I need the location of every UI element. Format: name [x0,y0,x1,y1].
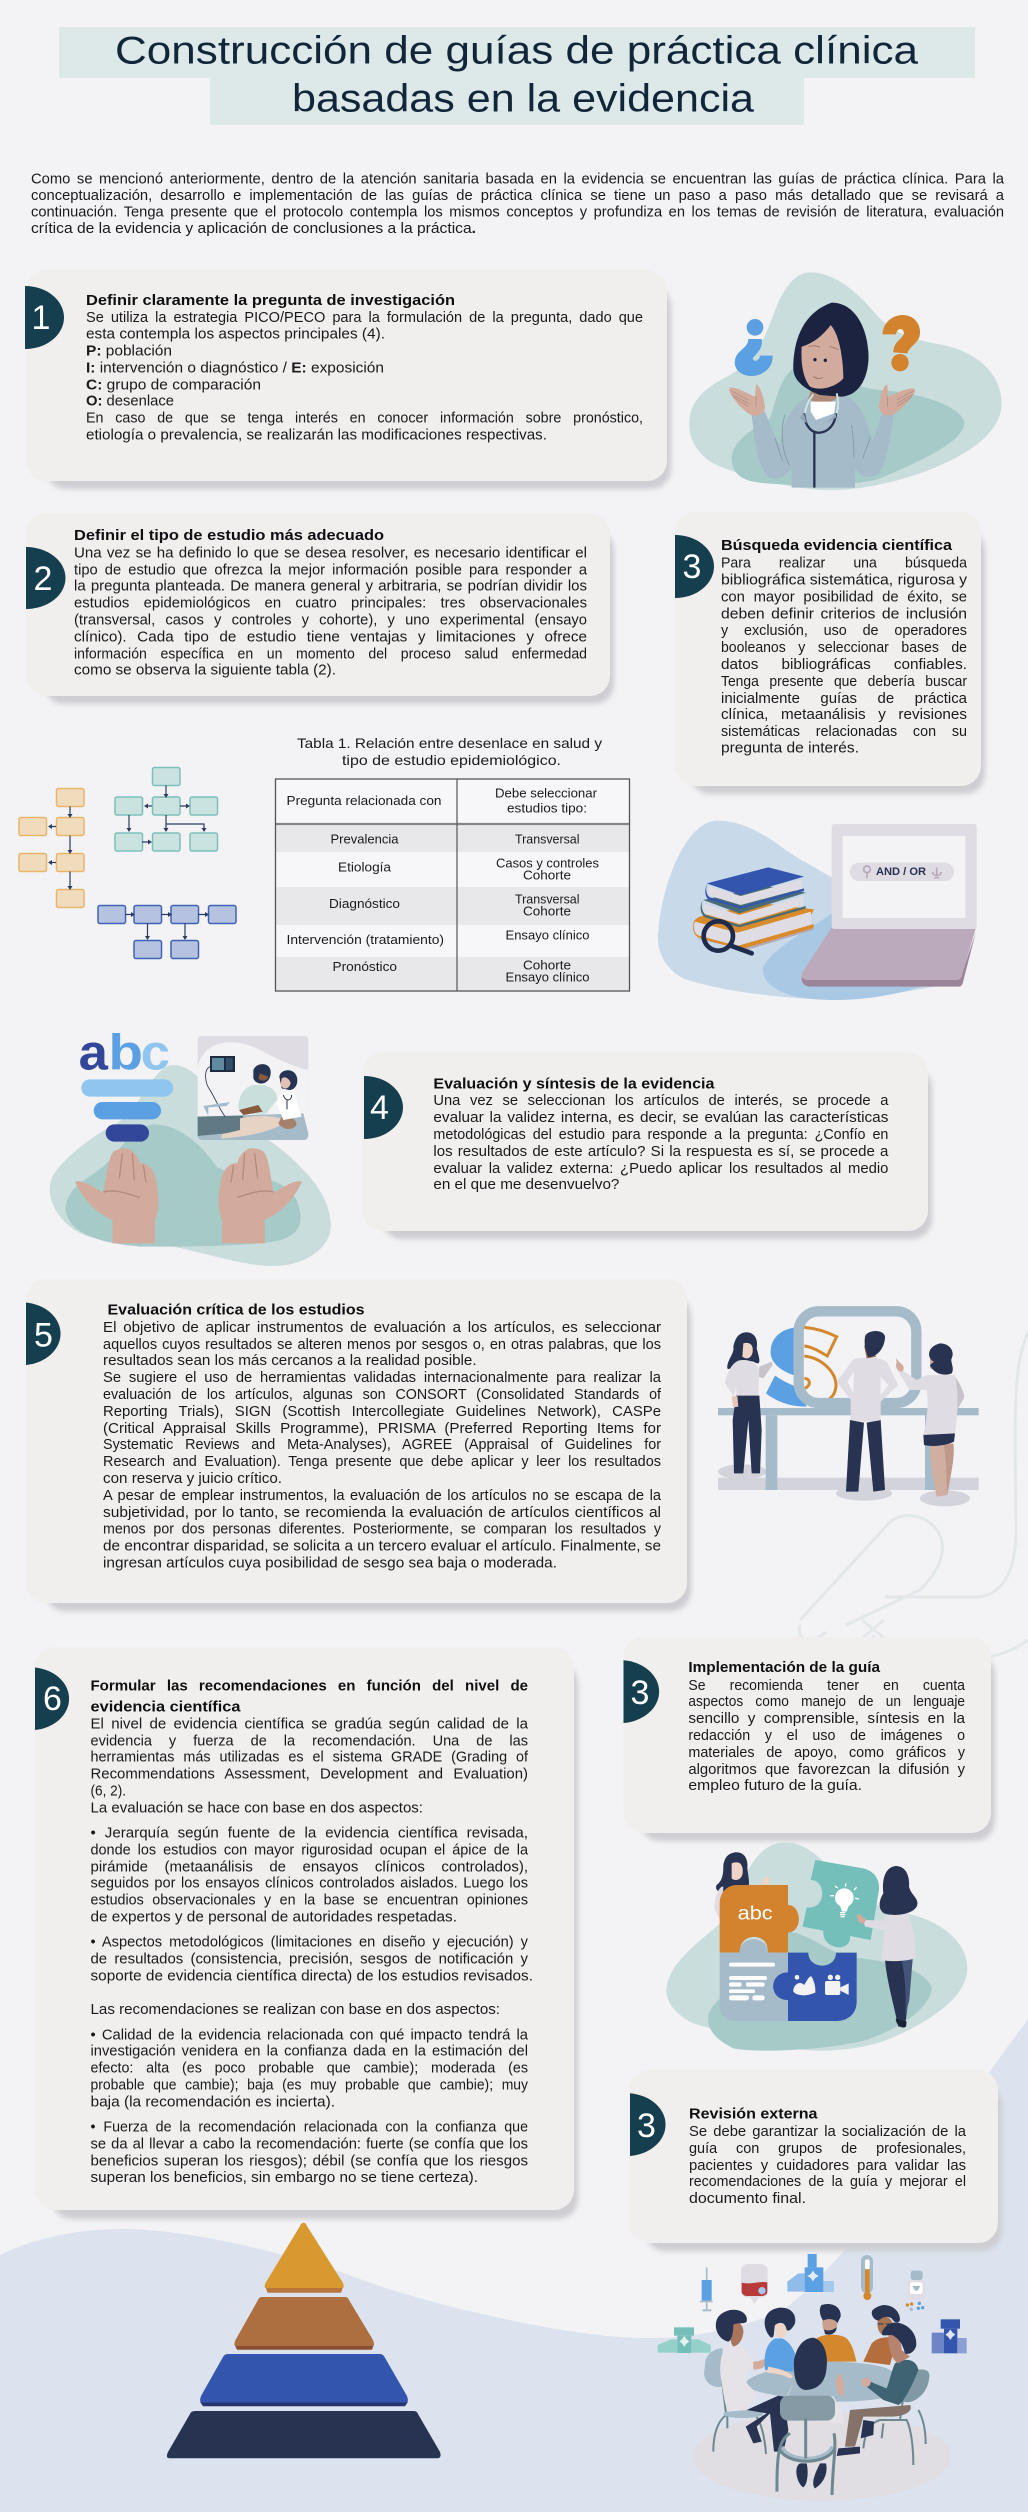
body step 5: Se sugiere el uso de herramientas validadas internacionalmente para realizar la [103,1370,662,1386]
abc letters: b [108,1024,143,1080]
badge implementación: 3 [631,1674,649,1712]
table caption [297,735,602,768]
body implementación: aspectos como manejo de un lenguaje [688,1694,965,1710]
illustration: books and laptop: AND / OR [876,866,926,878]
body revisión [689,2124,967,2207]
heading implementación: Implementación de la guía [688,1659,881,1676]
badge 3: 3 [683,548,701,586]
panel: step 2 tipo de estudio [26,513,614,704]
badge 1 [25,286,64,349]
body step 6: investigación venidera en la confianza dada en la estimación del [90,2044,528,2060]
panel: step 4 evaluación y síntesis [362,1052,932,1239]
body step 3: Tenga presente que debería buscar [721,674,967,690]
body step 5: A pesar de emplear instrumentos, la evaluación de los artículos no se escapa de la [103,1488,662,1504]
man at center [837,1331,898,1492]
body implementación: materiales de apoyo, como gráficos y [688,1745,966,1761]
chairs and table [704,2348,926,2465]
body step 5: ingresan artículos cuya posibilidad de sesgo sea baja o moderada. [103,1555,557,1571]
body implementación: empleo futuro de la guía. [688,1778,862,1794]
body step 2: como se observa la siguiente tabla (2). [74,662,336,678]
woman on right of puzzle [857,1866,917,2028]
table: relación desenlace y estudio: Ensayo clínico [506,928,590,943]
table: relación desenlace y estudio: Etiología [338,860,392,875]
body step 3: pregunta de interés. [721,741,859,757]
body step 2: Una vez se ha definido lo que se desea resolver, es necesario identificar el [74,545,587,561]
woman at right [896,1343,964,1497]
body step 5: subjetividad, por lo tanto, se recomienda la evaluación de artículos científicos al [103,1505,661,1521]
table: relación desenlace y estudio: Cohorte [523,868,571,883]
body step 6: Las recomendaciones se realizan con base en dos aspectos: [90,2002,500,2018]
heading revisión: Revisión externa [689,2106,818,2123]
table: relación desenlace y estudio: Diagnóstico [329,896,400,911]
body step 1: O: desenlace [86,393,174,409]
person blue shirt [765,2308,795,2378]
badge 6: 6 [43,1680,62,1718]
body revisión: guía con grupos de profesionales, [689,2141,966,2157]
table: relación desenlace y estudio: estudios tipo: [507,801,587,816]
body step 6: beneficios superan los riesgos); débil (se confía que los riesgos [90,2154,528,2170]
body step 6: • Jerarquía según fuente de la evidencia científica revisada, [90,1826,528,1842]
body step 5: evaluación de los artículos, algunas son CONSORT (Consolidated Standards of [103,1387,662,1403]
body revisión: recomendaciones de la guía y mejorar el [689,2174,966,2190]
body step 1: P: población [86,344,172,360]
body step 5: de encontrar disparidad, se solicita a un tercero evaluar el artículo. Finalmente, se [103,1538,661,1554]
body step 6: baja (la recomendación es incierta). [90,2095,335,2111]
body step 6: • Aspectos metodológicos (limitaciones en diseño y ejecución) y [90,1935,529,1951]
table: relación desenlace y estudio: Transversal [515,832,580,847]
person brown shirt [863,2305,900,2365]
table: relación desenlace y estudio: Transversal [515,892,580,907]
table: relación desenlace y estudio: Prevalencia [330,832,399,847]
badge 5 [26,1302,61,1365]
badge implementación [624,1660,659,1723]
body step 2: tipo de estudio que ofrezca la mejor información posible para responder a [74,562,588,578]
background wave [0,2019,1028,2512]
title: basadas en la evidencia [292,78,754,120]
body step 3: deben definir criterios de inclusión [721,607,967,623]
body step 3: clínica, metaanálisis y revisiones [721,707,967,723]
body step 6: soporte de evidencia científica directa) de los estudios revisados. [90,1969,533,1985]
body step 6: • Calidad de la evidencia relacionada con qué impacto tendrá la [90,2028,529,2044]
body step 6: evidencia y fuerza de la recomendación. Una de las [90,1734,528,1750]
panel: step 1 pregunta de investigación [25,270,671,489]
body step 6: • Fuerza de la recomendación relacionada con la confianza que [90,2120,528,2136]
body step 6: estudios observacionales y en la base se encuentran opiniones [90,1893,528,1909]
body step 4: evaluar la validez externa: ¿Puedo aplicar los resultados al medio [433,1161,888,1177]
panel: step 6 recomendaciones [35,1647,578,2219]
body revisión: pacientes y cuidadores para validar las [689,2158,966,2174]
decorative outline shapes [799,1332,1028,1660]
person right [837,2323,929,2456]
person left [716,2310,767,2412]
body step 1: Se utiliza la estrategia PICO/PECO para la formulación de la pregunta, dado que [86,310,643,326]
body revisión: Se debe garantizar la socialización de la [689,2124,967,2140]
body implementación: Se recomienda tener en cuenta [688,1678,966,1694]
badge 3 [675,535,714,598]
badge 5: 5 [34,1316,53,1354]
body step 4 [433,1093,889,1193]
intro text: conceptualización, desarrollo e implementación de las guías de práctica clínica se tiene un paso a paso más detallado que se revisará a [31,188,1005,204]
body step 5: (Critical Appraisal Skills Programme), PRISMA (Preferred Reporting Items for [103,1421,661,1437]
body implementación [688,1678,966,1794]
body step 3: Para realizar una búsqueda [721,556,968,572]
table caption: tipo de estudio epidemiológico. [342,752,561,768]
body step 4: en el que me desenvuelvo? [433,1177,619,1193]
body step 3: y exclusión, uso de operadores [721,623,967,639]
badge 4: 4 [370,1089,389,1127]
table caption: Tabla 1. Relación entre desenlace en salud y [297,735,602,751]
body step 6: probable que cambie); baja (es muy probable que cambie); muy [90,2078,529,2094]
body step 1 [86,310,643,443]
woman on left of puzzle [715,1852,769,1923]
heading step 3: Búsqueda evidencia científica [721,537,953,554]
body step 1: En caso de que se tenga interés en conocer información sobre pronóstico, [86,411,643,427]
illustration: team at a board [718,1311,979,1506]
body step 5: Reporting Trials), SIGN (Scottish Intercollegiate Guidelines Network), CASPe [103,1404,661,1420]
intro text: continuación. Tenga presente que el protocolo contempla los mismos conceptos y profundiza en los temas de revisión de literatura, evaluación [31,204,1004,220]
body step 6: El nivel de evidencia científica se gradúa según calidad de la [90,1717,529,1733]
body step 6: superan los beneficios, sin embargo no se tiene certeza). [90,2170,478,2186]
table: relación desenlace y estudio: Cohorte [523,958,571,973]
body step 6: seguidos por los ensayos clínicos controlados aislados. Luego los [90,1876,528,1892]
title: Construcción de guías de práctica clínica [115,30,918,72]
heading step 6: evidencia científica [90,1698,241,1715]
body revisión: documento final. [689,2191,806,2207]
body step 3: inicialmente guías de práctica [721,691,968,707]
body step 4: evaluar la validez interna, es decir, se evalúan las características [433,1110,888,1126]
body step 5: resultados sean los más cercanos a la realidad posible. [103,1353,477,1369]
table: relación desenlace y estudio: Pronóstico [332,959,397,974]
body step 6: efecto: alta (es poco probable que cambie); moderada (es [90,2061,528,2077]
badge 2 [26,547,66,609]
table: relación desenlace y estudio: Cohorte [523,904,571,919]
body step 5: Research and Evaluation). Tenga presente que debe aplicar y leer los resultados [103,1454,661,1470]
body step 6: de resultados (consistencia, precisión, sesgos de notificación y [90,1952,529,1968]
body step 3: bibliográfica sistemática, rigurosa y [721,573,968,589]
flowchart icons [19,768,236,958]
body step 5: aquellos cuyos resultados se alteren menos por sesgos o, en otras palabras, que los [103,1337,661,1353]
panel: implementación de la guía [624,1637,995,1841]
pyramid [167,2223,441,2458]
body step 1: etiología o prevalencia, se realizarán las modificaciones respectivas. [86,427,547,443]
body step 2 [74,545,588,678]
body step 4: los resultados de este artículo? Si la respuesta es sí, se procede a [433,1144,889,1160]
body step 5: Systematic Reviews and Meta-Analyses), AGREE (Appraisal of Guidelines for [103,1437,661,1453]
table: relación desenlace y estudio: Casos y controles [496,856,599,871]
body step 5: El objetivo de aplicar instrumentos de evaluación a los artículos, es seleccionar [103,1320,661,1336]
heading step 5: Evaluación crítica de los estudios [108,1302,364,1319]
body step 6: Recommendations Assessment, Development and Evaluation) [90,1767,528,1783]
badge revisión [630,2093,666,2156]
body step 5: menos por dos personas diferentes. Posteriormente, se comparan los resultados y [103,1521,662,1537]
medical icons [658,2254,967,2353]
body step 3: con mayor posibilidad de éxito, se [721,590,967,606]
body step 1: C: grupo de comparación [86,377,261,393]
body step 4: metodológicas del estudio para responde a la pregunta: ¿Confío en [433,1127,888,1143]
table: relación desenlace y estudio: Intervención (tratamiento) [286,932,444,947]
body step 3 [721,556,968,757]
body step 1: I: intervención o diagnóstico / E: exposición [86,360,384,376]
body step 3: sistemáticas relacionadas con su [721,724,967,740]
person orange shirt [817,2304,857,2362]
table: relación desenlace y estudio: Debe seleccionar [495,786,598,801]
body implementación: sencillo y comprensible, síntesis en la [688,1711,966,1727]
badge 1: 1 [32,299,50,337]
person center back [777,2338,844,2495]
body implementación: algoritmos que favorezcan la difusión y [688,1762,966,1778]
body step 3: booleanos y seleccionar bases de [721,640,967,656]
body step 6: se da al llevar a cabo la recomendación: fuerte (se confía que los [90,2137,528,2153]
abc letters: a [79,1024,109,1080]
body step 6: donde los estudios con mayor rigurosidad ocupan el ápice de la [90,1842,529,1858]
illustration: puzzle [666,1842,967,2051]
body implementación: redacción y el uso de imágenes o [688,1728,965,1744]
body step 2: clínico). Cada tipo de estudio tiene ventajas y limitaciones y ofrece [74,629,587,645]
illustration: books and laptop [658,821,977,1000]
intro text [31,171,1005,237]
body step 6: (6, 2). [90,1784,126,1800]
intro text: crítica de la evidencia y aplicación de conclusiones a la práctica . [31,221,476,237]
body step 5 [103,1320,662,1571]
heading step 4: Evaluación y síntesis de la evidencia [433,1076,715,1093]
illustration: doctor with question marks [689,272,1002,490]
simulation scene [198,1036,308,1140]
panel: step 3 búsqueda evidencia [675,512,985,794]
panel: step 5 evaluación crítica [26,1279,691,1611]
abc letters: c [141,1024,170,1080]
heading step 6: Formular las recomendaciones en función del nivel de [90,1677,528,1694]
body step 6: herramientas más utilizadas es el sistema GRADE (Grading of [90,1750,529,1766]
badge 6 [35,1668,69,1730]
body step 2: estudios epidemiológicos en cuatro principales: tres observacionales [74,595,587,611]
heading step 1: Definir claramente la pregunta de investigación [86,292,455,309]
heading step 2: Definir el tipo de estudio más adecuado [74,527,384,544]
table: relación desenlace y estudio: Pregunta relacionada con [286,793,442,808]
badge revisión: 3 [637,2107,656,2145]
badge 2: 2 [34,560,52,598]
body step 6: pirámide (metaanálisis de ensayos clínicos controlados), [90,1860,528,1876]
body step 3: datos bibliográficas confiables. [721,657,967,673]
badge 4 [364,1076,403,1139]
intro text: Como se mencionó anteriormente, dentro de la atención sanitaria basada en la evidencia se encuentran las guías de práctica clínica. Para la [31,171,1005,187]
illustration: abc, hands and simulation [50,1024,331,1266]
title [59,27,975,125]
heading step 6 [90,1677,528,1715]
body step 2: (transversal, casos y controles y cohorte), y uno experimental (ensayo [74,612,587,628]
panel: revisión externa [629,2070,1002,2251]
body step 6: de expertos y de personal de autoridades respetadas. [90,1910,457,1926]
table: relación desenlace y estudio [276,779,630,991]
table: relación desenlace y estudio: Ensayo clínico [506,970,590,985]
body step 5: con reserva y juicio crítico. [103,1471,282,1487]
illustration: puzzle: abc [738,1903,773,1924]
body step 6: La evaluación se hace con base en dos aspectos: [90,1801,423,1817]
body step 2: la pregunta planteada. De manera general y arbitraria, se podrían dividir los [74,579,587,595]
illustration: team meeting with medical icons [658,2254,967,2501]
abc letters [79,1024,170,1080]
body step 2: información específica en un momento del proceso salud enfermedad [74,646,587,662]
body step 4: Una vez se seleccionan los artículos de interés, se procede a [433,1093,889,1109]
body step 1: esta contempla los aspectos principales (4). [86,327,385,343]
woman at left [725,1332,773,1473]
body step 6 [90,1717,533,2186]
